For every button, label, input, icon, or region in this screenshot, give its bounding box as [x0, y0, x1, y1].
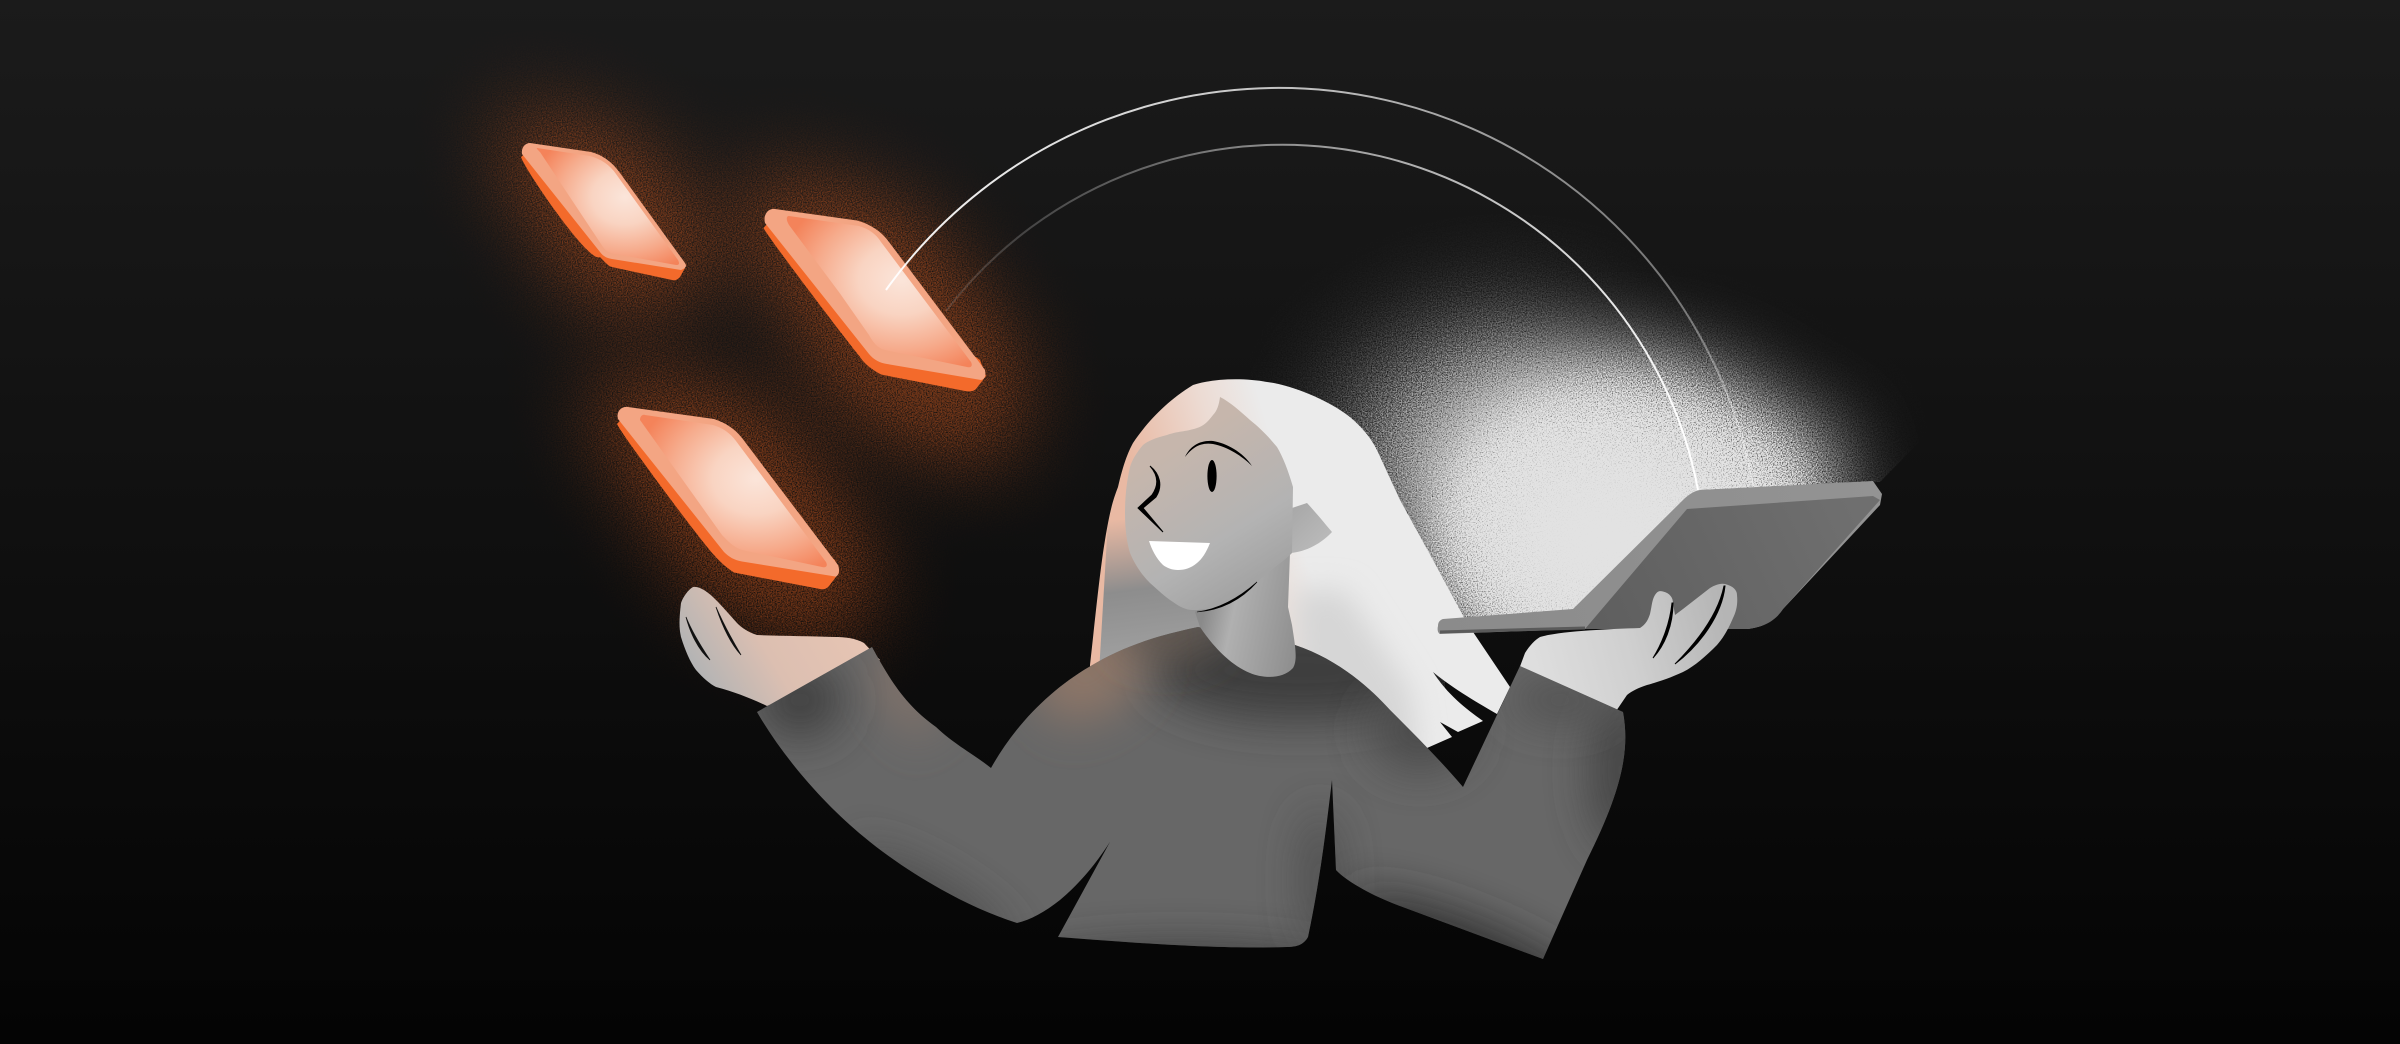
card: top left: [521, 143, 686, 280]
tablet: [1438, 481, 1882, 634]
eye: [1207, 460, 1217, 492]
ear: [1290, 503, 1332, 553]
nose: [1138, 466, 1163, 532]
mouth smile: [1149, 541, 1210, 570]
sweater: [757, 627, 1626, 959]
arc: outer trajectory: [886, 88, 1753, 486]
chin line: [1197, 582, 1257, 612]
orange glow behind cards: [530, 143, 985, 610]
right hand holding tablet: [1515, 584, 1737, 720]
hair: [1090, 379, 1510, 760]
face: [1125, 397, 1293, 610]
card: top right with arc start: [764, 209, 986, 391]
white glow from tablet screen: [1318, 303, 1830, 690]
card: lower: [617, 407, 839, 589]
neck: [1195, 553, 1296, 677]
arc: inner trajectory: [946, 145, 1698, 490]
left hand: [680, 587, 880, 706]
eyebrow: [1185, 441, 1252, 466]
